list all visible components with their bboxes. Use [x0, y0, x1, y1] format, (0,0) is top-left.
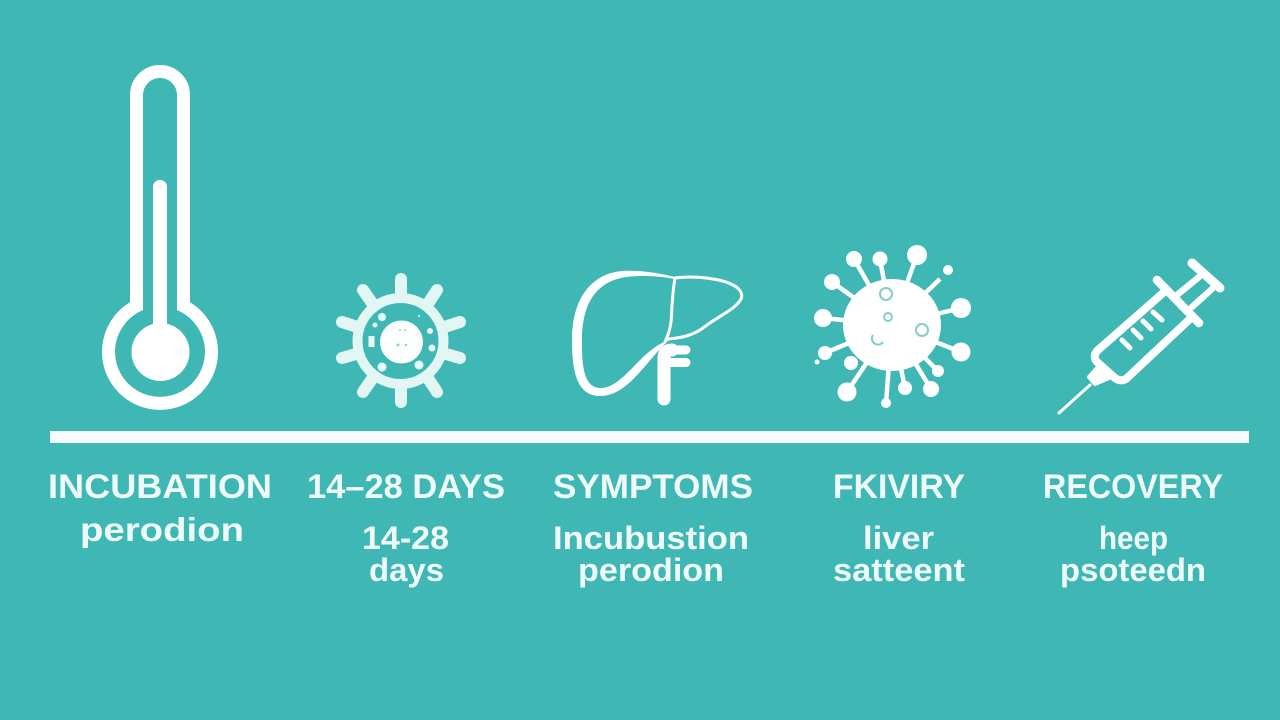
icon: thermometer — [109, 71, 212, 403]
column 1 text: perodion — [80, 511, 244, 548]
column 5 text: heep — [1099, 520, 1168, 556]
column 2 text — [307, 468, 505, 588]
icon: syringe — [1059, 263, 1220, 413]
icon: virus — [814, 245, 971, 408]
column 4 text: FKIVIRY — [833, 468, 965, 506]
column 3 text — [553, 468, 753, 588]
column 5 text — [1043, 468, 1223, 588]
column 2 text: 14–28 DAYS — [307, 468, 505, 506]
column 5 text: psoteedn — [1060, 552, 1206, 588]
column 4 text — [833, 468, 965, 588]
column 5 text: RECOVERY — [1043, 468, 1223, 506]
column 4 text: liver — [863, 520, 934, 556]
timeline bar — [50, 431, 1249, 443]
column 4 text: satteent — [833, 552, 965, 588]
icon: liver — [572, 271, 742, 399]
column 1 text — [48, 468, 272, 548]
column 2 text: days — [369, 552, 444, 588]
column 3 text: perodion — [578, 552, 724, 588]
column 3 text: Incubustion — [553, 520, 749, 556]
column 1 text: INCUBATION — [48, 468, 272, 506]
column 2 text: 14-28 — [362, 520, 449, 556]
column 3 text: SYMPTOMS — [553, 468, 753, 506]
icon: cell — [342, 279, 460, 402]
